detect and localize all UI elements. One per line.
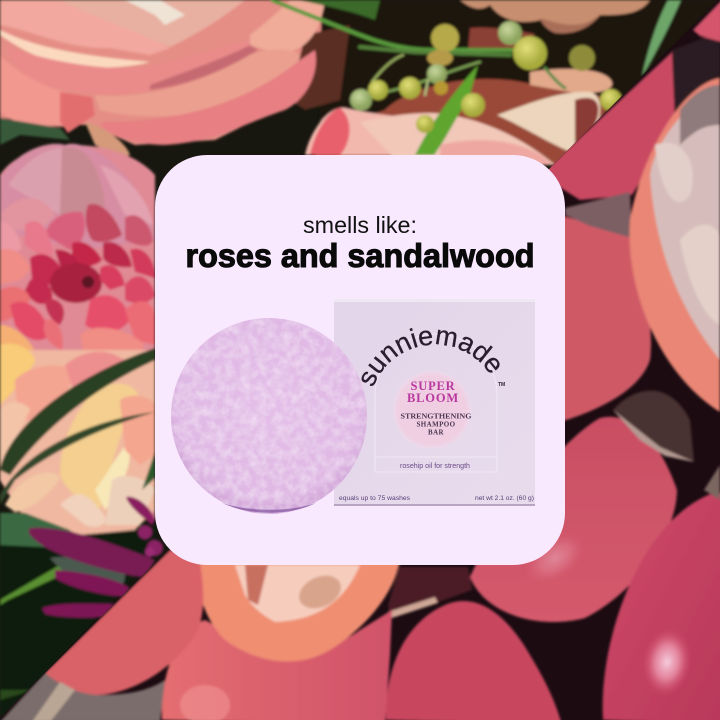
- box product descriptor: BAR: [428, 428, 445, 436]
- mimosa balls: [350, 21, 622, 133]
- text: smells like: smells like:: [303, 212, 417, 238]
- mimosa backdrop: [305, 0, 720, 165]
- foliage behind dahlia: [0, 118, 70, 145]
- purple bloom: [29, 497, 163, 618]
- grey backdrop: [0, 673, 165, 720]
- box product name: [407, 379, 459, 405]
- fruit: lower left pale: [162, 610, 392, 720]
- panel: product card: [155, 155, 565, 565]
- stem: bottom middle: [388, 567, 472, 617]
- fruit: centre lower: [470, 417, 677, 622]
- fruit: cut rosehip top right: [630, 78, 720, 412]
- dahlia flower: [0, 144, 155, 520]
- dahlia lower yellow petals: [0, 344, 158, 720]
- box brand arc: sunniemade: [362, 328, 500, 386]
- dark textured backdrop: [670, 36, 720, 113]
- box product name: SUPER: [411, 379, 456, 393]
- box rosehip note: rosehip oil for strength: [400, 463, 470, 470]
- mimosa stems and leaves: [272, 0, 681, 155]
- stem at top of card: [565, 192, 632, 238]
- fruit: centre right: [560, 215, 651, 422]
- fruit: bottom right: [603, 493, 720, 720]
- product box: [334, 299, 535, 506]
- stem right edge: [704, 465, 720, 500]
- box wash count: equals up to 75 washes: [339, 495, 411, 502]
- box product descriptor: SHAMPOO: [417, 420, 456, 428]
- box product name: BLOOM: [407, 391, 459, 405]
- fruit: far left: [45, 550, 203, 695]
- box trademark: TM: [498, 382, 505, 388]
- fruit: cut rosehip bottom: [197, 560, 400, 661]
- box net weight: net wt 2.1 oz. (60 g): [475, 495, 534, 502]
- fruit: top pink band: [540, 52, 675, 200]
- rose bloom: [0, 0, 350, 158]
- box product descriptor: [400, 412, 472, 436]
- box product descriptor: STRENGTHENING: [400, 412, 472, 420]
- heading: roses and sandalwood: roses and sandalwood: [186, 237, 534, 274]
- shampoo bar: [171, 318, 367, 514]
- stem: centre lower: [613, 391, 694, 462]
- box pink disc: [393, 371, 471, 449]
- fruit: bottom middle: [386, 601, 562, 720]
- box arch outline: [375, 334, 497, 472]
- long dark leaves: [0, 348, 155, 700]
